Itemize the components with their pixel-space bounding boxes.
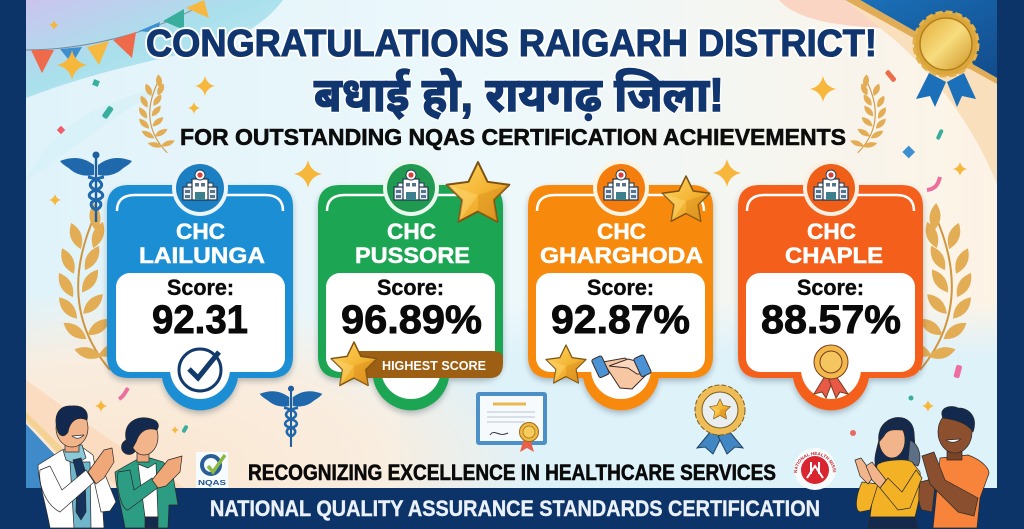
name: CHC [387,219,436,244]
score: Score: [167,275,234,300]
name: PUSSORE [355,243,470,268]
logo: National Health Mission: NATIONAL HEALTH MISSION [794,452,836,473]
bottom banner text: NATIONAL QUALITY ASSURANCE STANDARDS CERTIFICATION [210,496,820,521]
person: woman in green jacket [115,418,182,528]
icon: hospital [172,160,228,216]
icon: star badge [546,345,586,383]
highest score ribbon [355,351,503,378]
icon: handshake [591,354,652,389]
panel: CHC Gharghoda [528,160,713,410]
caduceus top-left [60,152,132,222]
title: CONGRATULATIONS RAIGARH DISTRICT! [146,23,877,65]
small laurel left [137,74,176,153]
logo: National Health Mission [794,448,836,490]
logo: NQAS [196,452,228,488]
name [355,219,470,268]
score: Score: [377,275,444,300]
subtitle: FOR OUTSTANDING NQAS CERTIFICATION ACHIEVEMENTS [180,124,846,150]
name: CHC [597,219,646,244]
title: CONGRATULATIONS RAIGARH DISTRICT! [146,23,877,65]
score: 88.57% [761,298,901,342]
highest score ribbon: HIGHEST SCORE [382,358,486,373]
score: 92.87% [551,298,690,342]
icon: hospital [383,160,439,216]
score: Score: [587,275,654,300]
name: CHC [176,219,225,244]
score: 96.89% [341,298,482,342]
panel: CHC Pussore [318,160,509,410]
Hindi title: बधाई हो, रायगढ़ जिला! [314,68,724,121]
score [341,275,482,342]
name: CHC [807,219,856,244]
score: 92.31 [152,298,248,342]
panel: CHC Lailunga [107,160,293,410]
name [785,219,883,268]
name: CHAPLE [785,243,883,268]
icon: hospital [803,160,859,216]
panel: CHC Chaple [738,160,923,410]
person: man in orange shirt [919,406,989,528]
tagline: RECOGNIZING EXCELLENCE IN HEALTHCARE SERVICES [248,460,776,485]
score [551,275,690,342]
icon: star badge [331,342,377,385]
caduceus bottom [260,386,322,447]
icon: large star [447,162,509,222]
large laurel right [904,203,976,370]
name: LAILUNGA [139,243,265,268]
icon: top star [662,176,710,221]
Hindi title: बधाई हो, रायगढ़ जिला! [314,68,724,121]
gold medal with ribbon [914,12,978,107]
name [540,219,703,268]
name [139,219,265,268]
name: GHARGHODA [540,243,703,268]
bunting banner [26,0,209,73]
score [761,275,901,342]
logo: NQAS: NQAS [198,478,226,487]
person: woman in yellow sweater [855,418,922,528]
icon: award rosette [695,385,745,454]
large laurel left [54,203,126,370]
icon: check mark [179,349,221,391]
small laurel right [849,74,888,153]
confetti and sparkles [49,20,967,436]
person: doctor clapping [38,406,116,528]
icon: medal [814,345,848,398]
score [152,275,248,342]
icon: certificate [476,392,547,452]
icon: hospital [593,160,649,216]
score: Score: [797,275,864,300]
